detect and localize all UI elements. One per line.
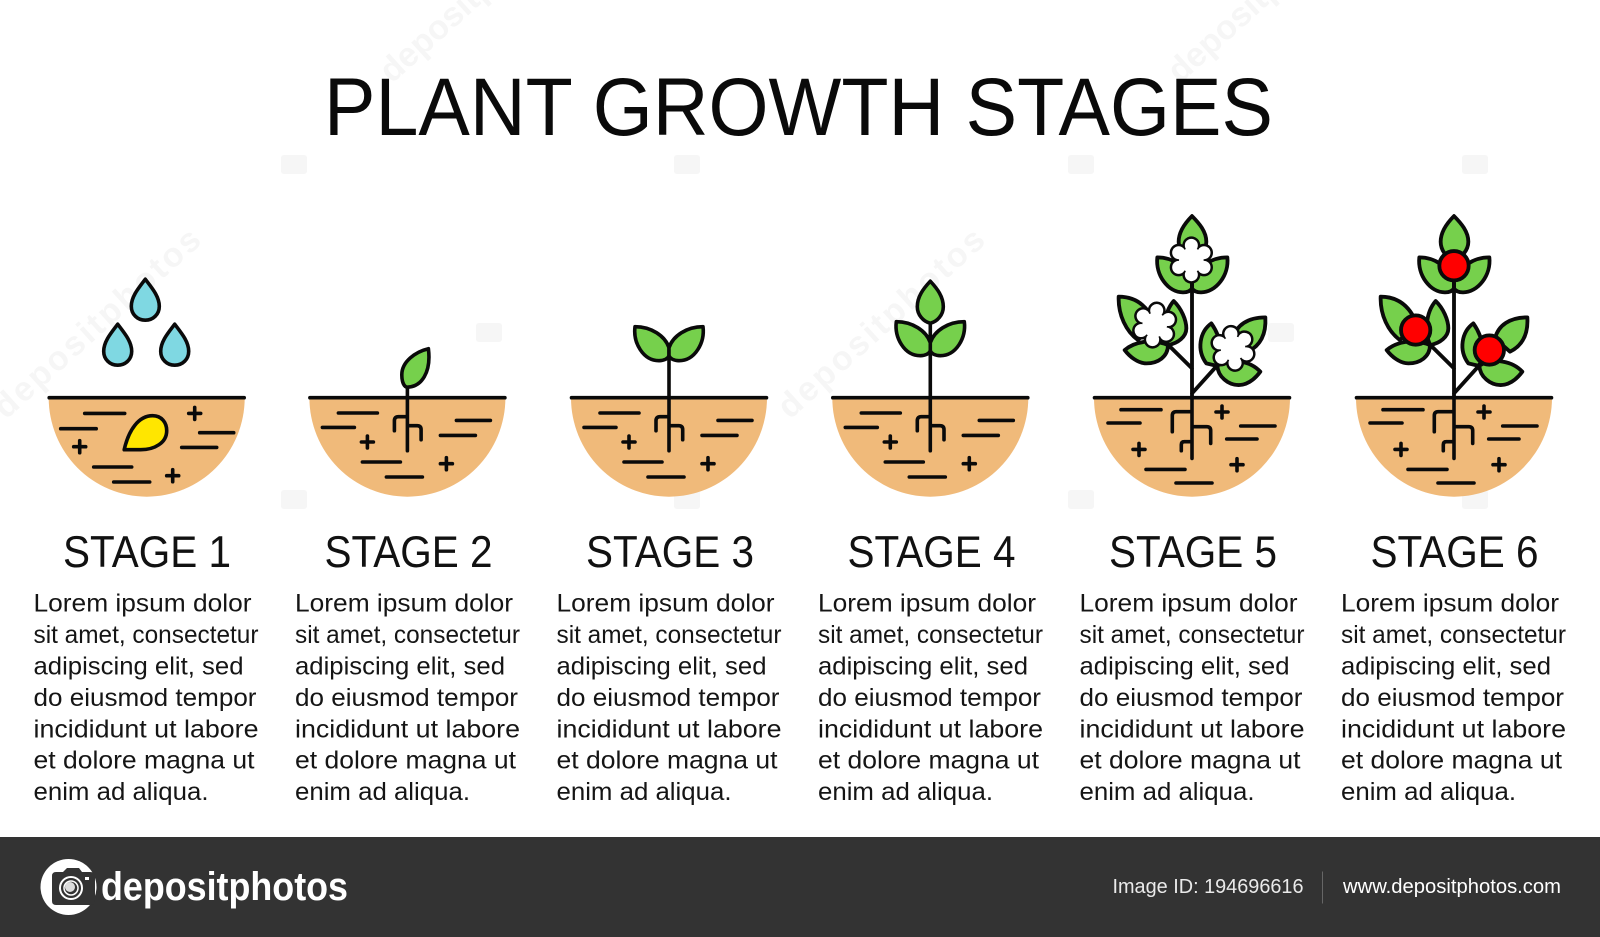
heading: stage 4: STAGE 4 bbox=[848, 528, 1016, 577]
text block: stage 5: sit amet, consectetur bbox=[1080, 621, 1304, 649]
text block: stage 6: do eiusmod tempor bbox=[1341, 684, 1564, 712]
text block: stage 1 bbox=[34, 590, 258, 806]
text block: stage 5: incididunt ut labore bbox=[1080, 715, 1304, 743]
heading: stage 1: STAGE 1 bbox=[63, 528, 231, 577]
text block: stage 6 bbox=[1341, 590, 1566, 806]
logo wordmark: depositphotos bbox=[101, 865, 348, 909]
heading: stage 2: STAGE 2 bbox=[324, 528, 492, 577]
text block: stage 2: incididunt ut labore bbox=[295, 715, 520, 743]
icon: water drop right bbox=[161, 324, 189, 365]
stage 4 illustration: young plant with three leaves bbox=[832, 281, 1028, 497]
text block: stage 4: adipiscing elit, sed bbox=[818, 652, 1028, 680]
text block: stage 3: adipiscing elit, sed bbox=[556, 652, 766, 680]
text block: stage 6: adipiscing elit, sed bbox=[1341, 652, 1551, 680]
heading: stage 3: STAGE 3 bbox=[586, 528, 754, 577]
text block: stage 2: Lorem ipsum dolor bbox=[295, 590, 513, 618]
text block: stage 1: sit amet, consectetur bbox=[34, 621, 258, 649]
text block: stage 1: Lorem ipsum dolor bbox=[34, 590, 252, 618]
heading: stage 6: STAGE 6 bbox=[1370, 528, 1538, 577]
website url: www.depositphotos.com bbox=[1342, 876, 1561, 898]
text block: stage 4: enim ad aliqua. bbox=[818, 778, 993, 806]
text block: stage 2 bbox=[295, 590, 520, 806]
text block: stage 6: sit amet, consectetur bbox=[1341, 621, 1566, 649]
icon: top flower bbox=[1170, 236, 1213, 284]
text block: stage 3 bbox=[556, 590, 782, 806]
text block: stage 1: incididunt ut labore bbox=[34, 715, 258, 743]
text block: stage 1: do eiusmod tempor bbox=[34, 684, 256, 712]
text block: stage 4 bbox=[818, 590, 1043, 806]
text block: stage 3: do eiusmod tempor bbox=[556, 684, 780, 712]
stage 6 illustration: fruiting plant bbox=[1356, 216, 1552, 497]
icon: left fruit bbox=[1401, 315, 1430, 345]
text block: stage 3: incididunt ut labore bbox=[556, 715, 781, 743]
text block: stage 4: incididunt ut labore bbox=[818, 715, 1043, 743]
text block: stage 2: sit amet, consectetur bbox=[295, 621, 520, 649]
text block: stage 6: incididunt ut labore bbox=[1341, 715, 1566, 743]
icon: seed bbox=[124, 416, 167, 450]
text: depositphotos bbox=[770, 220, 992, 426]
text block: stage 5: Lorem ipsum dolor bbox=[1080, 590, 1298, 618]
text block: stage 2: enim ad aliqua. bbox=[295, 778, 470, 806]
icon: top fruit bbox=[1439, 251, 1469, 280]
text block: stage 3: et dolore magna ut bbox=[556, 747, 778, 775]
text block: stage 6: Lorem ipsum dolor bbox=[1341, 590, 1559, 618]
text block: stage 4: et dolore magna ut bbox=[818, 747, 1039, 775]
icon: water drop left bbox=[104, 324, 132, 365]
stage 3 illustration: seedling with two leaves bbox=[571, 327, 767, 497]
text block: stage 2: et dolore magna ut bbox=[295, 747, 516, 775]
text block: stage 5: adipiscing elit, sed bbox=[1080, 652, 1290, 680]
text block: stage 1: enim ad aliqua. bbox=[34, 778, 208, 806]
text block: stage 3: Lorem ipsum dolor bbox=[556, 590, 774, 618]
stage 5 illustration: flowering plant bbox=[1094, 216, 1290, 497]
text block: stage 1: adipiscing elit, sed bbox=[34, 652, 244, 680]
title: PLANT GROWTH STAGES bbox=[324, 62, 1273, 153]
footer bar bbox=[0, 837, 1600, 937]
icon: left flower bbox=[1130, 299, 1179, 351]
image id: Image ID: 194696616 bbox=[1112, 876, 1304, 898]
text block: stage 6: enim ad aliqua. bbox=[1341, 778, 1516, 806]
text block: stage 5: et dolore magna ut bbox=[1080, 747, 1301, 775]
text block: stage 3: enim ad aliqua. bbox=[556, 778, 731, 806]
text block: stage 4: sit amet, consectetur bbox=[818, 621, 1043, 649]
icon: right fruit bbox=[1475, 335, 1504, 365]
text block: stage 3: sit amet, consectetur bbox=[556, 621, 782, 649]
icon: water drop top bbox=[131, 279, 159, 320]
icon: right flower bbox=[1208, 322, 1258, 375]
text block: stage 4: do eiusmod tempor bbox=[818, 684, 1041, 712]
text block: stage 5 bbox=[1080, 590, 1304, 806]
text block: stage 2: adipiscing elit, sed bbox=[295, 652, 505, 680]
text block: stage 5: do eiusmod tempor bbox=[1080, 684, 1302, 712]
text block: stage 4: Lorem ipsum dolor bbox=[818, 590, 1036, 618]
text block: stage 6: et dolore magna ut bbox=[1341, 747, 1562, 775]
text block: stage 1: et dolore magna ut bbox=[34, 747, 255, 775]
stage 2 illustration: sprout with one leaf bbox=[309, 349, 505, 497]
icon: camera logo bbox=[40, 859, 96, 915]
text block: stage 2: do eiusmod tempor bbox=[295, 684, 518, 712]
stage 1 illustration: seed, water drops and soil bbox=[49, 279, 245, 497]
heading: stage 5: STAGE 5 bbox=[1109, 528, 1277, 577]
text block: stage 5: enim ad aliqua. bbox=[1080, 778, 1254, 806]
